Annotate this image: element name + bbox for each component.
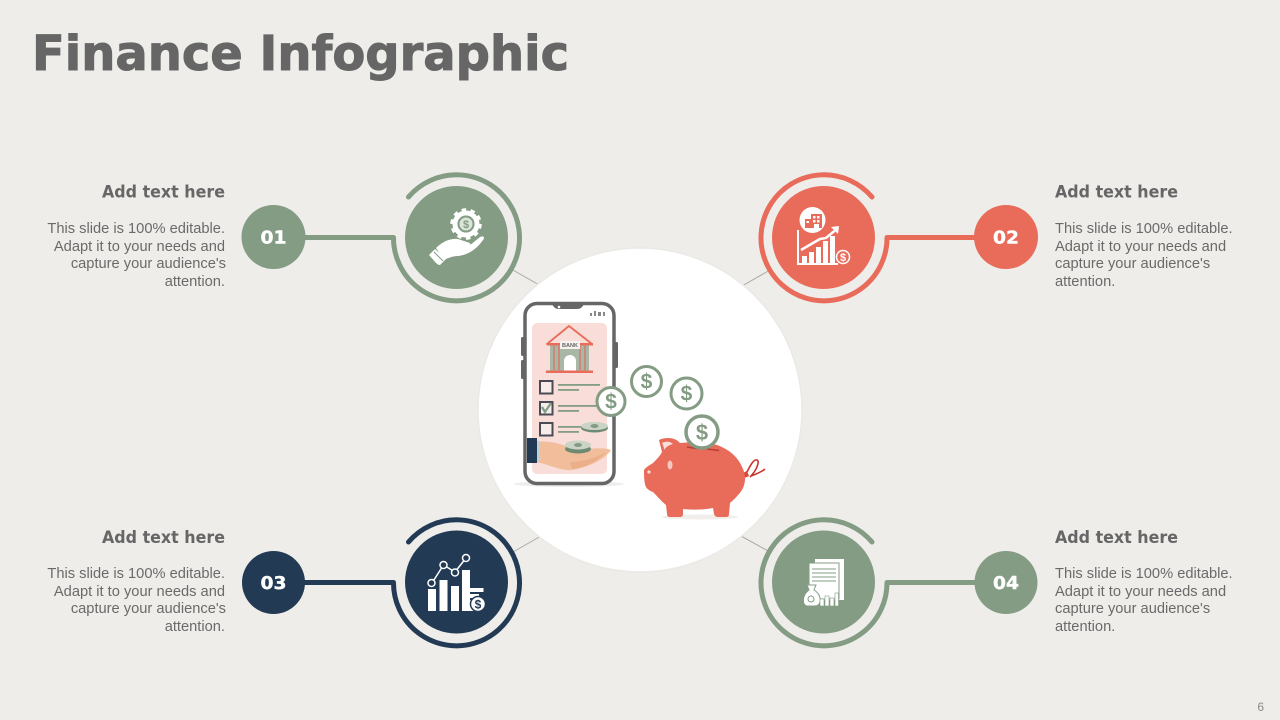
icon: hand holding gear — [429, 210, 484, 265]
bank building: BANK — [562, 343, 578, 349]
icon: growth chart with building — [798, 207, 850, 264]
text block 04: This slide is 100% editable. — [1055, 566, 1233, 582]
icon: bars, line and coins — [428, 554, 486, 612]
page number: 6 — [1257, 700, 1264, 714]
text block 02 — [1055, 182, 1233, 290]
ring and leader 01 — [305, 175, 519, 301]
panel: step 01 — [242, 175, 519, 301]
number badge 02 — [974, 205, 1038, 269]
number badge 03 — [242, 551, 305, 614]
text block 03: attention. — [165, 619, 225, 635]
main circle 03 — [405, 530, 508, 634]
number badge 01: 01 — [260, 228, 286, 248]
illustration: phone with bank checklist — [514, 304, 624, 487]
text block 04: capture your audience's — [1055, 601, 1210, 617]
cash roll on list — [581, 422, 608, 432]
text block 03 — [47, 528, 226, 635]
title: Finance Infographic — [32, 26, 569, 82]
hand holding cash — [527, 438, 611, 470]
ring and leader 02 — [761, 175, 975, 301]
number badge 01 — [242, 205, 306, 269]
checklist — [540, 381, 600, 436]
panel: step 04 — [761, 520, 1038, 646]
illustration: piggy bank — [644, 416, 765, 520]
main circle 02 — [772, 186, 875, 289]
text block 02: Adapt it to your needs and — [1055, 239, 1226, 255]
text block 03: This slide is 100% editable. — [47, 566, 225, 582]
connector lines to central circle — [513, 270, 770, 552]
ring and leader 03 — [305, 520, 519, 646]
text block 01: Adapt it to your needs and — [54, 239, 225, 255]
text block 04: Add text here — [1055, 528, 1178, 547]
panel: step 03 — [242, 520, 519, 646]
icon: falling dollar coins — [597, 366, 702, 416]
icon: bars, line and coins: $ — [475, 598, 482, 612]
icon: growth chart with building: $ — [840, 252, 846, 264]
text block 02: capture your audience's — [1055, 256, 1210, 272]
ring and leader 04 — [761, 520, 975, 646]
text block 03: Adapt it to your needs and — [54, 584, 225, 600]
text block 03: capture your audience's — [71, 601, 226, 617]
bank building — [546, 326, 593, 373]
text block 04: Adapt it to your needs and — [1055, 584, 1226, 600]
illustration: piggy bank: $ — [696, 420, 708, 445]
main circle 04 — [772, 530, 875, 634]
text block 02: Add text here — [1055, 182, 1178, 202]
text block 04 — [1055, 528, 1233, 635]
number badge 02: 02 — [993, 228, 1019, 248]
text block 04: attention. — [1055, 619, 1115, 635]
icon: documents with money bag — [803, 559, 844, 606]
number badge 04 — [974, 551, 1038, 614]
text block 01: attention. — [165, 274, 225, 290]
text block 01 — [47, 182, 226, 290]
text block 02: attention. — [1055, 274, 1115, 290]
text block 03: Add text here — [102, 528, 225, 547]
icon: falling dollar coins: $ — [681, 382, 693, 406]
text block 02: This slide is 100% editable. — [1055, 221, 1233, 237]
icon: falling dollar coins: $ — [641, 370, 653, 394]
panel: step 02 — [761, 175, 1038, 301]
text block 01: capture your audience's — [71, 256, 226, 272]
text block 01: Add text here — [102, 182, 225, 202]
icon: hand holding gear: $ — [463, 219, 469, 231]
central white circle — [478, 248, 802, 572]
number badge 04: 04 — [993, 573, 1019, 594]
icon: falling dollar coins: $ — [605, 390, 617, 414]
text block 01: This slide is 100% editable. — [47, 221, 225, 237]
main circle 01 — [405, 186, 508, 289]
number badge 03: 03 — [260, 573, 286, 594]
